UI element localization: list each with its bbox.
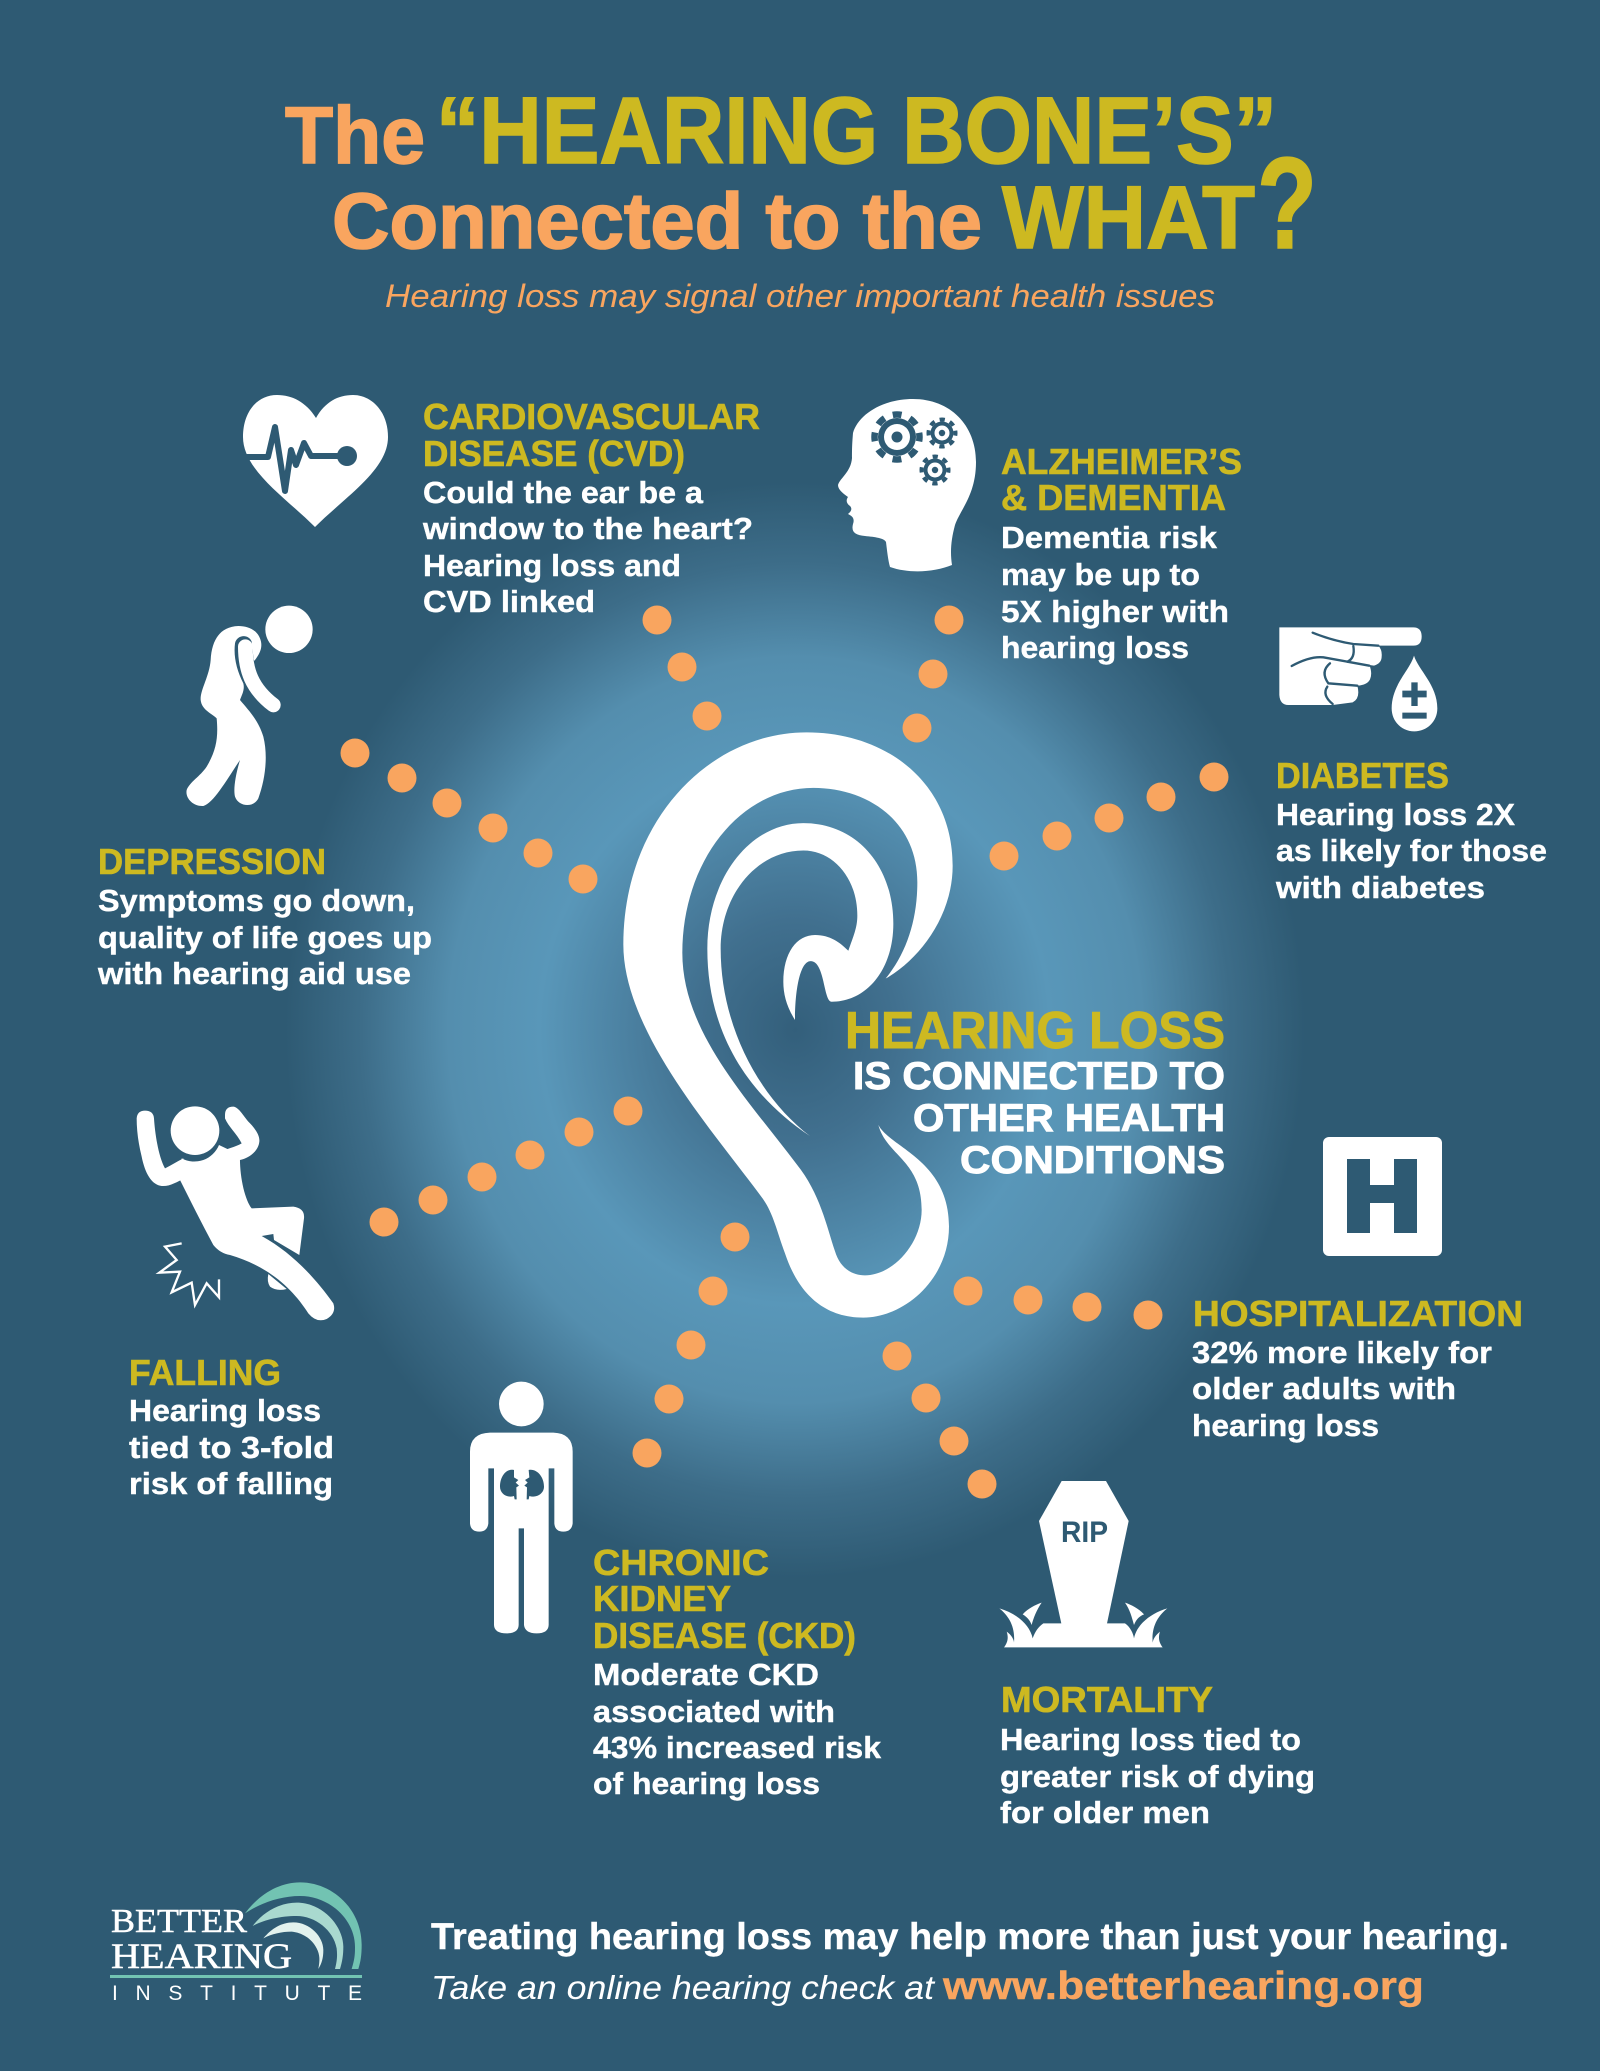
text: hospitalization: hearing loss [1192,1408,1379,1443]
text: depression: Symptoms go down, [98,883,415,918]
title: “HEARING BONE’S” [436,78,1277,184]
icon: falling figure [137,1106,334,1320]
logo: better hearing institute [110,1882,362,2005]
text: cvd: DISEASE (CVD) [423,433,685,474]
panel: falling [129,1106,334,1501]
text: mortality: MORTALITY [1001,1679,1213,1720]
text: alzheimer's: 5X higher with [1001,594,1229,629]
text: alzheimer's: hearing loss [1001,630,1189,665]
title: Connected to the [332,176,982,265]
title: ? [1257,130,1317,276]
text: diabetes: as likely for those [1276,833,1547,868]
footer message: Treating hearing loss may help more than just your hearing. [431,1916,1509,1957]
panel: alzheimer's and dementia [838,399,1242,665]
text: cvd [422,396,760,619]
connector dots [340,606,1228,1498]
center callout: hearing loss: OTHER HEALTH [913,1097,1225,1140]
icon: ear [623,732,953,1318]
panel: hospitalization [1192,1137,1523,1443]
text: ckd: Moderate CKD [593,1657,819,1692]
text: alzheimer's: ALZHEIMER’S [1001,441,1242,482]
text: ckd: associated with [593,1694,835,1729]
text: cvd: Could the ear be a [423,475,704,510]
panel: cardiovascular disease [243,395,760,619]
text: depression: DEPRESSION [98,841,326,882]
center callout: hearing loss: HEARING LOSS [845,1002,1225,1060]
text: ckd: KIDNEY [593,1578,731,1619]
text: hospitalization: 32% more likely for [1192,1335,1492,1370]
logo: better hearing institute: BETTER [111,1903,247,1940]
text: falling: risk of falling [129,1466,333,1501]
icon: head with gears [838,399,976,571]
footer message: www.betterhearing.org [942,1965,1424,2008]
text: diabetes: with diabetes [1275,870,1485,905]
icon: tombstone: RIP [1061,1516,1108,1549]
text: diabetes [1275,755,1547,905]
center callout: hearing loss: CONDITIONS [960,1139,1225,1182]
icon: heart with pulse [243,395,388,527]
footer message [431,1916,1509,2008]
footer message: Take an online hearing check at [431,1969,936,2006]
text: ckd: CHRONIC [593,1542,769,1583]
text: alzheimer's: may be up to [1001,557,1200,592]
text: ckd: 43% increased risk [593,1730,882,1765]
text: falling: Hearing loss [129,1393,321,1428]
text: falling [129,1352,334,1501]
panel: mortality [999,1481,1315,1830]
text: mortality: greater risk of dying [1000,1759,1315,1794]
text: cvd: Hearing loss and [423,548,681,583]
panel: chronic kidney disease [470,1382,882,1801]
text: alzheimer's: & DEMENTIA [1001,477,1226,518]
text: diabetes: Hearing loss 2X [1276,797,1515,832]
panel: depression [97,606,432,991]
icon: tombstone [999,1481,1167,1647]
title: WHAT [1002,167,1255,267]
icon: figure with kidneys [470,1382,573,1633]
text: hospitalization: HOSPITALIZATION [1193,1293,1523,1334]
text: mortality: for older men [1000,1795,1210,1830]
text: falling: tied to 3-fold [129,1430,334,1465]
text: depression: quality of life goes up [98,920,432,955]
text: cvd: window to the heart? [422,511,753,546]
icon: hospital sign [1323,1137,1442,1256]
text: cvd: CVD linked [423,584,595,619]
center callout: hearing loss [845,1002,1225,1182]
text: alzheimer's [1001,441,1242,665]
text: hospitalization [1192,1293,1523,1443]
text: depression [97,841,432,991]
logo: better hearing institute: HEARING [111,1936,292,1976]
logo: better hearing institute: INSTITUTE [112,1982,362,2005]
text: depression: with hearing aid use [97,956,411,991]
text: hospitalization: older adults with [1192,1371,1456,1406]
text: diabetes: DIABETES [1276,755,1449,796]
icon: slumped figure [186,606,313,806]
text: ckd: of hearing loss [593,1766,820,1801]
title: The [285,91,425,181]
subtitle: Hearing loss may signal other important health issues [385,278,1215,314]
title [285,78,1317,276]
text: mortality [1000,1679,1315,1830]
panel: diabetes [1275,627,1547,905]
text: alzheimer's: Dementia risk [1001,520,1218,555]
text: ckd: DISEASE (CKD) [593,1615,856,1656]
icon: finger prick and blood drop [1279,627,1437,731]
center callout: hearing loss: IS CONNECTED TO [853,1055,1225,1098]
text: ckd [593,1542,882,1801]
text: falling: FALLING [129,1352,281,1393]
text: mortality: Hearing loss tied to [1000,1722,1301,1757]
text: cvd: CARDIOVASCULAR [423,396,760,437]
